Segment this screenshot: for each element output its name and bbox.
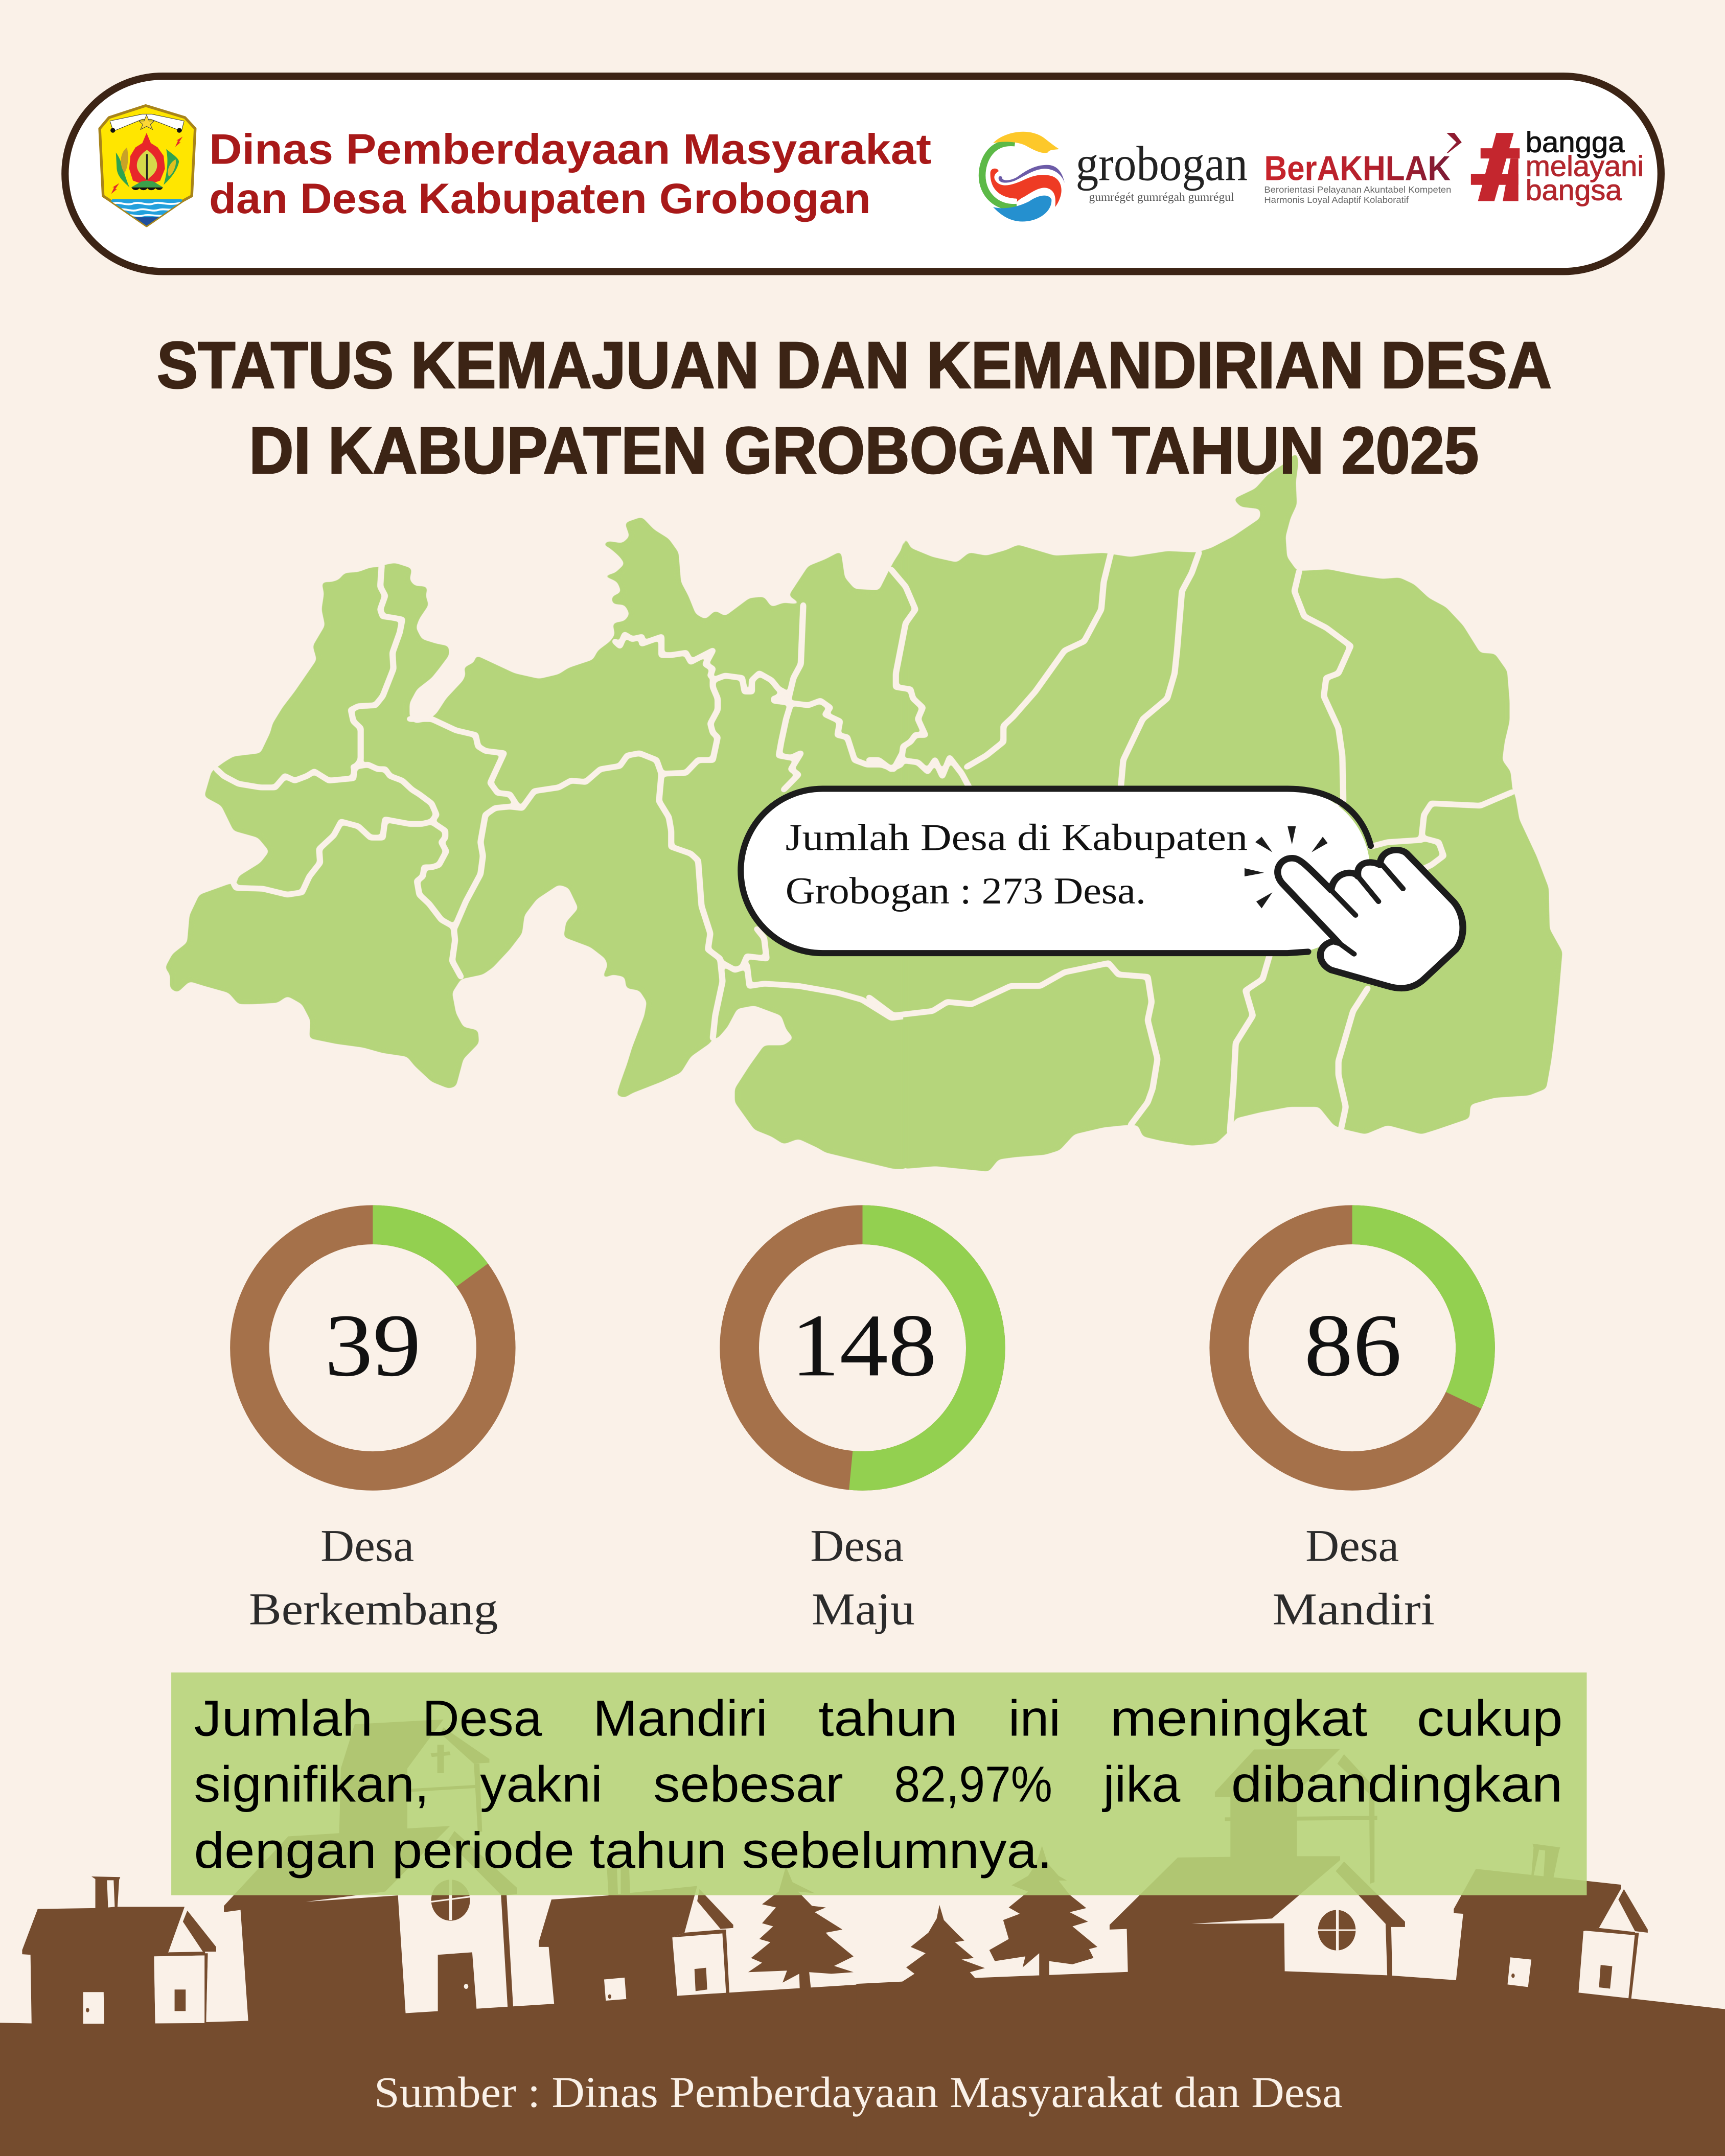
header pill: [65, 76, 1661, 271]
label: Desa Berkembang: Desa: [320, 1521, 414, 1571]
text: BerAKHLAK logo: BerAKHLAK: [1264, 150, 1451, 188]
text: BerAKHLAK logo: Harmonis Loyal Adaptif Kolaboratif: [1264, 195, 1409, 205]
text: BerAKHLAK logo: [1264, 133, 1462, 205]
label: Desa Maju: Desa: [810, 1521, 904, 1571]
icon: BerAKHLAK chevron: [1446, 133, 1462, 153]
label: Desa Berkembang: Berkembang: [249, 1585, 498, 1635]
icon: Grobogan regency crest: [100, 106, 195, 227]
panel: summary statement: [171, 1673, 1587, 1895]
tree 1: [748, 1866, 854, 1989]
icon: Grobogan logo mark: [982, 132, 1065, 221]
tree 3: [990, 1846, 1097, 1975]
map district borders left: [216, 565, 910, 1038]
title: STATUS KEMAJUAN DAN KEMANDIRIAN DESA: [157, 329, 1552, 402]
summary text: sebesar: [653, 1756, 843, 1813]
icon: pointing hand: [1245, 826, 1463, 988]
text: bangga melayani bangsa: bangga: [1526, 126, 1625, 158]
heading: agency name: Dinas Pemberdayaan Masyarakat: [209, 125, 931, 173]
left scene: ground, houses and tree: [0, 1720, 869, 2156]
title: [157, 329, 1552, 488]
label: Desa Mandiri: Mandiri: [1273, 1585, 1435, 1635]
map district borders right: [869, 552, 1512, 1132]
text: bangga melayani bangsa: bangsa: [1526, 174, 1622, 206]
donut: Desa Berkembang: [249, 1225, 496, 1471]
house 4: [1110, 1749, 1405, 1976]
summary text: dibandingkan: [1231, 1756, 1562, 1813]
label: Desa Mandiri: Desa: [1305, 1521, 1399, 1571]
donut: Desa Maju: [740, 1225, 985, 1471]
summary text: jika: [1101, 1756, 1181, 1813]
summary text: tahun: [818, 1690, 957, 1747]
callout text: Jumlah Desa di Kabupaten: [786, 817, 1248, 859]
summary text: dengan periode tahun sebelumnya.: [194, 1822, 1052, 1879]
summary text: Desa: [422, 1690, 542, 1747]
donut: Desa Berkembang: 39: [325, 1295, 421, 1395]
donut: Desa Mandiri: [1229, 1225, 1476, 1471]
title: DI KABUPATEN GROBOGAN TAHUN 2025: [249, 414, 1479, 488]
header panel: [65, 76, 1661, 271]
church: [224, 1720, 517, 2022]
map silhouette left part: [165, 517, 910, 1169]
text: Grobogan logotype: gumrégét gumrégah gumrégul: [1089, 191, 1234, 203]
label: Desa Mandiri: [1273, 1521, 1435, 1635]
source note: Sumber : Dinas Pemberdayaan Masyarakat dan Desa: [374, 2068, 1343, 2117]
label: Desa Berkembang: [249, 1521, 498, 1635]
house 3: [539, 1866, 733, 2005]
callout bubble: [741, 789, 1371, 953]
summary text: cukup: [1417, 1690, 1562, 1747]
donut: Desa Maju: 148: [791, 1295, 937, 1395]
map silhouette right part: [869, 452, 1562, 1172]
summary text: signifikan,: [194, 1756, 429, 1813]
donut: Desa Mandiri: 86: [1304, 1295, 1402, 1395]
village silhouette scene: [0, 1720, 1725, 2156]
summary text: [194, 1690, 1562, 1879]
summary text: ini: [1008, 1690, 1061, 1747]
summary text: Jumlah: [194, 1690, 373, 1747]
house 1: [22, 1876, 248, 2024]
map of Grobogan regency: [165, 452, 1562, 1172]
text: bangga melayani bangsa: melayani: [1526, 150, 1644, 182]
text: Grobogan logotype: grobogan: [1076, 136, 1248, 191]
text: bangga melayani bangsa: [1526, 126, 1644, 206]
callout text: Grobogan : 273 Desa.: [786, 870, 1146, 912]
summary text: Mandiri: [593, 1690, 768, 1747]
summary text: meningkat: [1110, 1690, 1367, 1747]
house 5: [1454, 1844, 1648, 2000]
label: Desa Maju: Maju: [812, 1585, 915, 1635]
icon: click sparks: [1245, 826, 1328, 909]
summary text: 82,97%: [894, 1756, 1052, 1813]
heading: agency name: [209, 125, 931, 222]
text: BerAKHLAK logo: Berorientasi Pelayanan Akuntabel Kompeten: [1264, 184, 1451, 195]
summary text: yakni: [480, 1756, 603, 1813]
label: Desa Maju: [810, 1521, 915, 1635]
tree 2: [901, 1905, 985, 1983]
icon: hash mark: [1471, 133, 1520, 201]
callout text: [786, 817, 1248, 912]
heading: agency name: dan Desa Kabupaten Grobogan: [209, 174, 871, 222]
right scene: ground, houses and trees: [856, 1749, 1725, 2156]
callout: total villages: [741, 789, 1463, 988]
